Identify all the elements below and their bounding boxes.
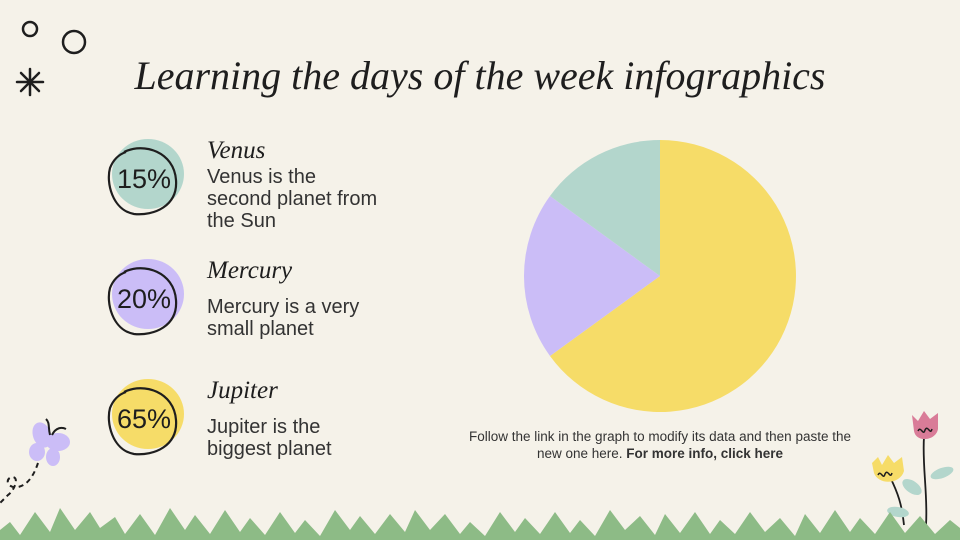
icon: flowers xyxy=(872,411,954,526)
text block: Jupiter xyxy=(207,377,332,460)
text block: Venus: Venus xyxy=(207,137,265,164)
text block: Venus: Venus is the second planet from the Sun xyxy=(207,166,377,232)
text block: Mercury: Mercury xyxy=(207,257,292,284)
text block: Venus xyxy=(207,137,377,232)
text block: Jupiter: Jupiter xyxy=(207,377,278,404)
badge: 65% xyxy=(108,379,184,456)
text block: Mercury: Mercury is a very small planet xyxy=(207,296,359,340)
badge: 20%: 20% xyxy=(117,284,171,314)
pie chart xyxy=(524,140,796,412)
badge: 65%: 65% xyxy=(117,404,171,434)
note text: Follow the link in the graph to modify its data and then paste the new one here. For more info, click here xyxy=(469,429,851,461)
badge: 15% xyxy=(108,139,184,216)
decor: top-left doodles xyxy=(16,20,86,96)
text block: Jupiter: Jupiter is the biggest planet xyxy=(207,416,332,460)
badge: 20% xyxy=(108,259,184,336)
title: Learning the days of the week infographics xyxy=(134,53,826,98)
icon: butterfly xyxy=(0,418,70,504)
decor: grass strip xyxy=(0,508,960,540)
badge: 15%: 15% xyxy=(117,164,171,194)
text block: Mercury xyxy=(206,257,360,340)
